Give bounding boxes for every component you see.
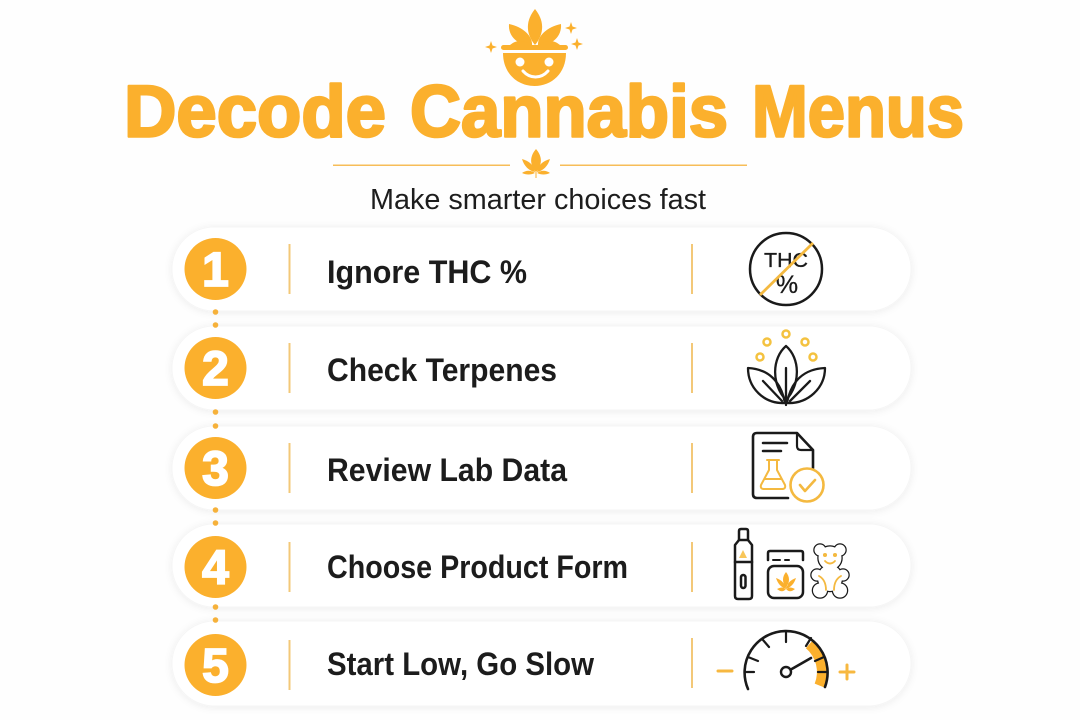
icon: THC percent crossed out: % bbox=[776, 271, 798, 299]
panel: step 1 bbox=[172, 227, 911, 311]
icon: terpene leaves bbox=[748, 330, 825, 405]
title: Cannabis bbox=[410, 72, 728, 152]
gummy bear bbox=[812, 544, 848, 598]
panel: step 5 bbox=[172, 621, 911, 706]
number badge 2 bbox=[184, 337, 246, 399]
number badge 5: 5 bbox=[202, 640, 229, 693]
number badge 1 bbox=[184, 238, 246, 300]
panel: step 2 bbox=[172, 326, 911, 410]
icon: lab report with check bbox=[753, 433, 824, 502]
panel: step 3 bbox=[172, 426, 911, 510]
icon: THC percent crossed out: THC bbox=[764, 250, 808, 272]
vape pen bbox=[735, 529, 752, 599]
step 1 label: Ignore THC % bbox=[327, 254, 527, 290]
panel: step 4 bbox=[172, 309, 911, 706]
subtitle: Make smarter choices fast bbox=[370, 184, 706, 216]
connector dots bbox=[213, 309, 218, 623]
number badge 2: 2 bbox=[202, 343, 229, 396]
step 2 label: Check Terpenes bbox=[327, 352, 557, 388]
icon: smiling cannabis bowl logo bbox=[485, 9, 583, 86]
icon: dosage gauge bbox=[718, 631, 854, 689]
title: Decode bbox=[124, 72, 386, 152]
number badge 5 bbox=[184, 634, 246, 696]
number badge 4 bbox=[184, 536, 246, 598]
jar bbox=[768, 551, 803, 598]
number badge 3: 3 bbox=[202, 443, 229, 496]
step 3 label: Review Lab Data bbox=[327, 452, 567, 488]
number badge 1: 1 bbox=[202, 244, 229, 297]
step 4 label: Choose Product Form bbox=[327, 549, 628, 585]
step 5 label: Start Low, Go Slow bbox=[327, 646, 594, 682]
number badge 3 bbox=[184, 437, 246, 499]
divider with leaf bbox=[333, 149, 747, 178]
icon: vape, jar and gummy bear bbox=[735, 529, 848, 599]
title: Menus bbox=[752, 72, 964, 152]
icon: THC percent crossed out bbox=[750, 233, 822, 305]
number badge 4: 4 bbox=[202, 542, 229, 595]
